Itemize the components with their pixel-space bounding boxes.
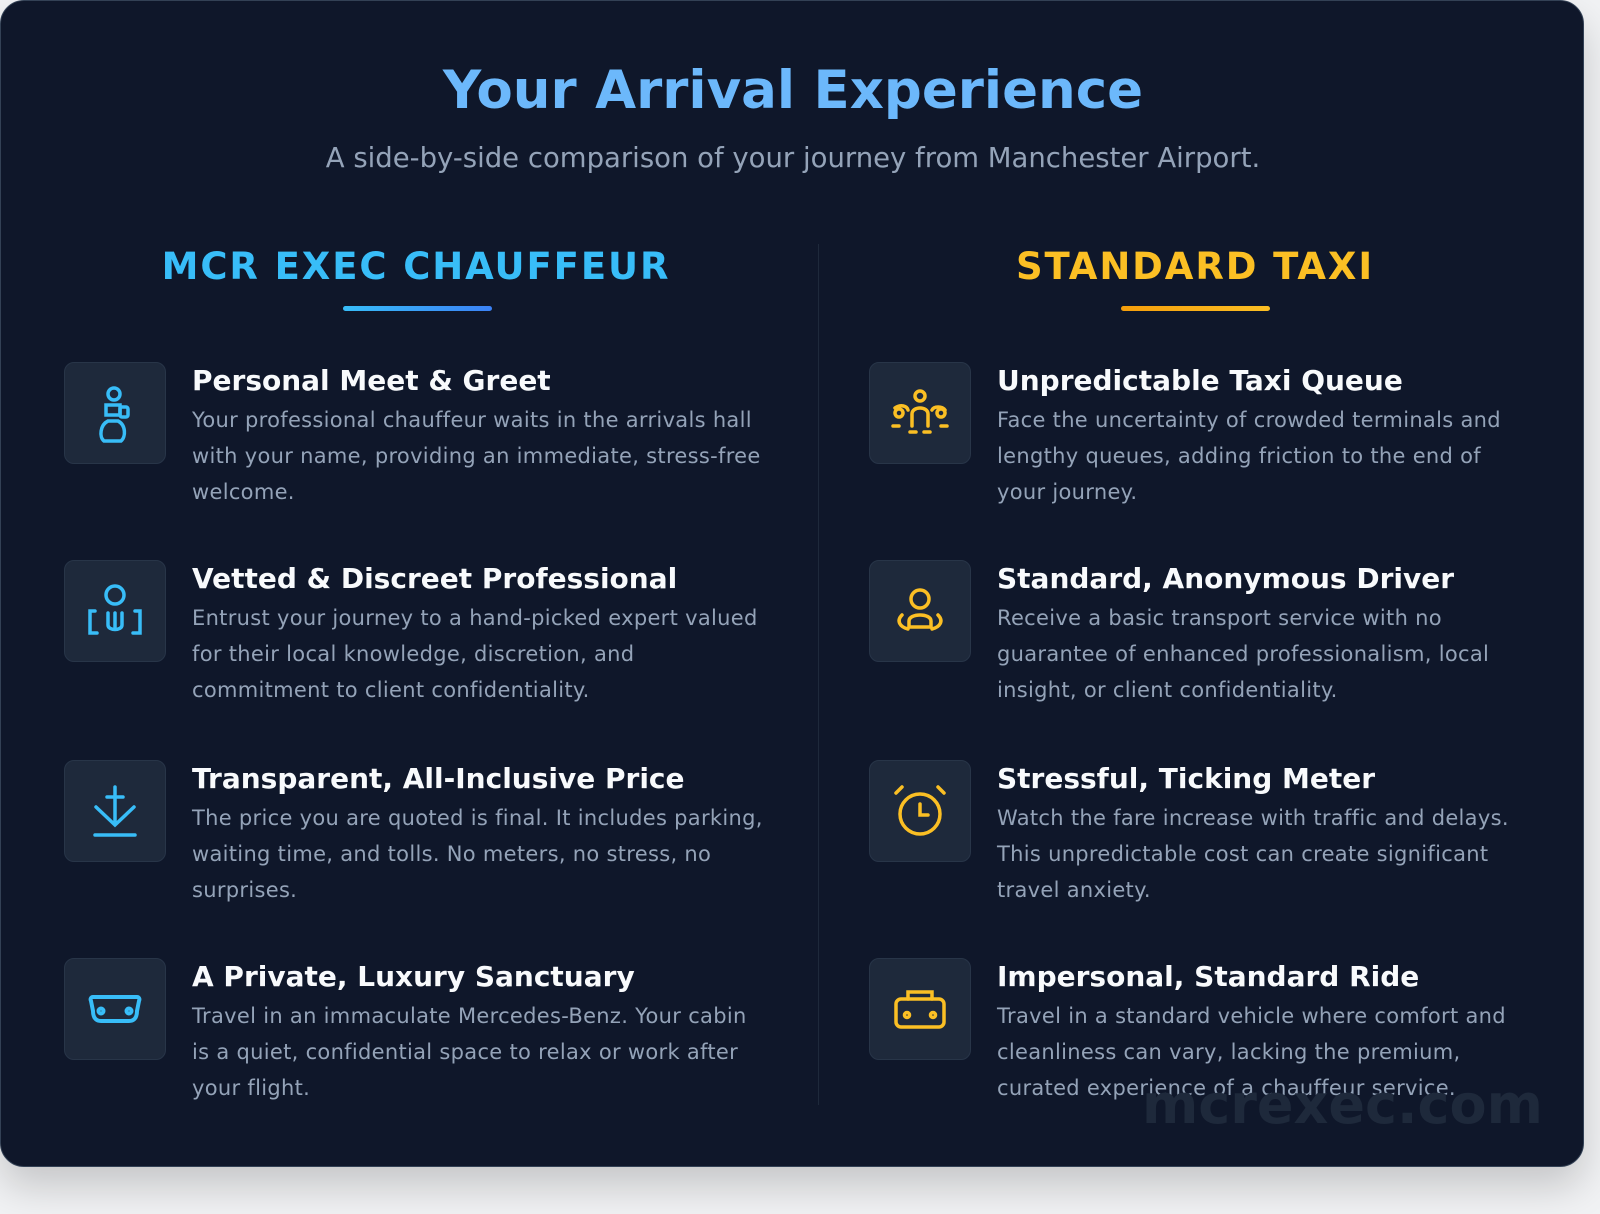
underline: chauffeur	[343, 306, 492, 311]
icon: taxi	[869, 958, 971, 1060]
description: Travel in an immaculate Mercedes-Benz. Your cabin is a quiet, confidential space to relax or work after your flight.	[192, 1004, 747, 1100]
icon: car	[64, 958, 166, 1060]
icon: alarm clock	[869, 760, 971, 862]
subtitle: A side-by-side comparison of your journey from Manchester Airport.	[326, 142, 1260, 174]
icon: person with sign	[64, 362, 166, 464]
title: Unpredictable Taxi Queue	[997, 364, 1403, 397]
title: Your Arrival Experience	[443, 60, 1143, 121]
item: meet & greet	[64, 362, 761, 504]
item: anonymous driver	[869, 560, 1489, 702]
title: Impersonal, Standard Ride	[997, 960, 1419, 993]
description: Entrust your journey to a hand-picked expert valued for their local knowledge, discretion, and commitment to client confidentiality.	[192, 606, 758, 702]
item: meter	[869, 760, 1509, 902]
item: taxi queue	[869, 362, 1501, 504]
description: Receive a basic transport service with no guarantee of enhanced professionalism, local insight, or client confidentiality.	[997, 606, 1489, 702]
item: standard ride	[869, 958, 1506, 1100]
item: price	[64, 760, 763, 902]
description: Watch the fare increase with traffic and delays. This unpredictable cost can create significant travel anxiety.	[997, 806, 1509, 902]
description: Face the uncertainty of crowded terminals and lengthy queues, adding friction to the end of your journey.	[997, 408, 1501, 504]
description: Your professional chauffeur waits in the arrivals hall with your name, providing an immediate, stress-free welcome.	[192, 408, 761, 504]
title: Vetted & Discreet Professional	[192, 562, 677, 595]
header: taxi: STANDARD TAXI	[1016, 245, 1374, 288]
description: Travel in a standard vehicle where comfort and cleanliness can vary, lacking the premium, curated experience of a chauffeur service.	[997, 1004, 1506, 1100]
icon: professional	[64, 560, 166, 662]
icon: driver	[869, 560, 971, 662]
icon: queue	[869, 362, 971, 464]
item: vetted	[64, 560, 758, 702]
title: Stressful, Ticking Meter	[997, 762, 1375, 795]
title: Transparent, All-Inclusive Price	[192, 762, 685, 795]
watermark: mcrexec.com	[1142, 1073, 1543, 1136]
title: Standard, Anonymous Driver	[997, 562, 1454, 595]
title: A Private, Luxury Sanctuary	[192, 960, 635, 993]
header: chauffeur: MCR EXEC CHAUFFEUR	[162, 245, 670, 288]
title: Personal Meet & Greet	[192, 364, 551, 397]
item: luxury	[64, 958, 747, 1100]
icon: download arrow	[64, 760, 166, 862]
description: The price you are quoted is final. It includes parking, waiting time, and tolls. No meters, no stress, no surprises.	[192, 806, 763, 902]
underline: taxi	[1121, 306, 1270, 311]
